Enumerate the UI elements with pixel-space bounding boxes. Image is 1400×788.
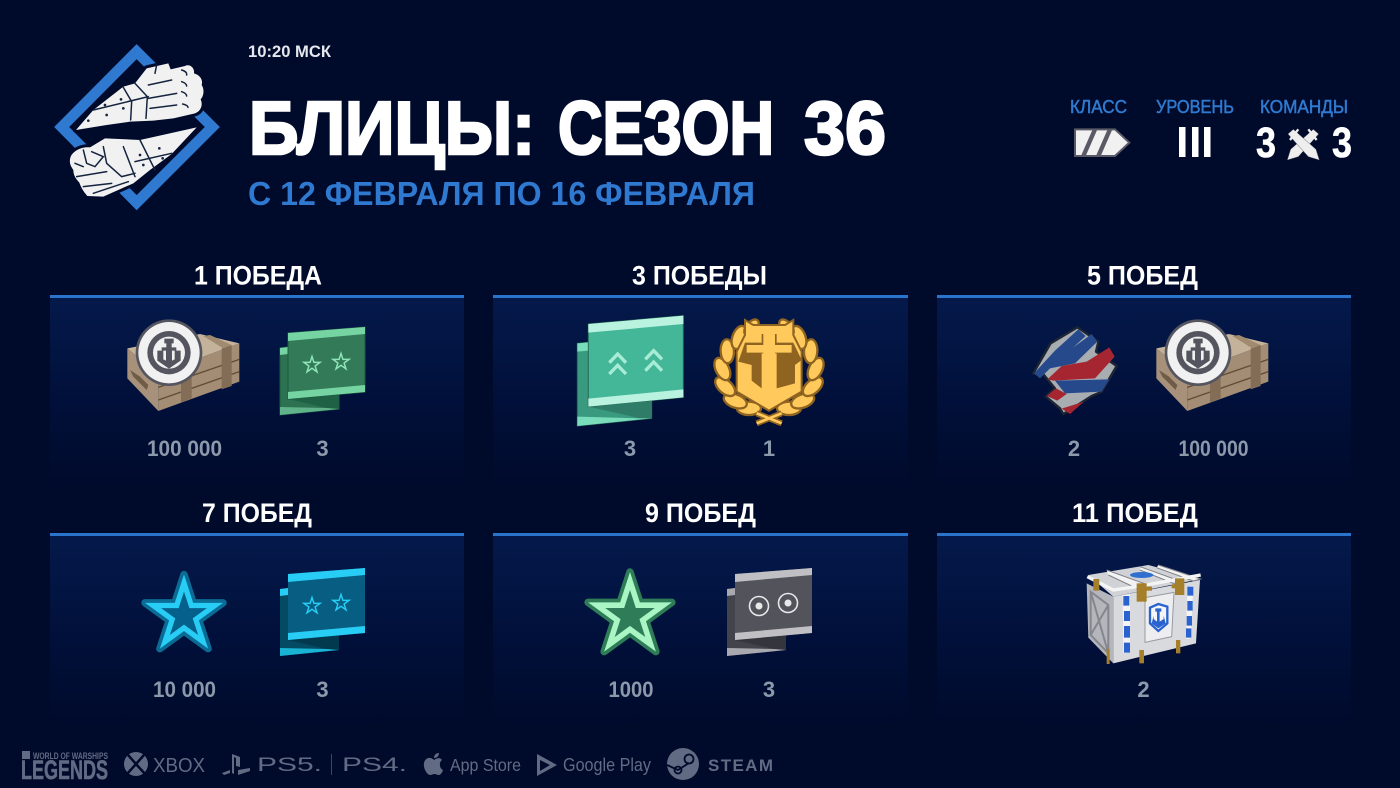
logo: PlayStation 5 and 4: PS5. (257, 755, 322, 776)
panel: 11 wins: 2 (1137, 677, 1150, 702)
battle info: class: КЛАСС (1070, 97, 1127, 117)
icon: green star (588, 572, 672, 652)
title: СЕЗОН (558, 86, 774, 170)
logo: Google Play (537, 754, 651, 776)
logo: PlayStation 5 and 4: PS4. (342, 755, 407, 776)
icon: green star flag (280, 327, 365, 415)
battle info: teams: 3 (1332, 119, 1352, 167)
battle info: tier (1156, 97, 1234, 157)
panel: 11 wins: 11 ПОБЕД (1072, 498, 1198, 528)
icon: blue star (145, 574, 223, 649)
battle info: teams (1256, 97, 1352, 167)
subtitle: dates: С 12 ФЕВРАЛЯ ПО 16 ФЕВРАЛЯ (248, 175, 755, 212)
icon: destroyer class (1075, 129, 1129, 156)
panel: 3 wins: 3 ПОБЕДЫ (632, 260, 767, 290)
logo: crossed gauntlets in diamond (62, 52, 212, 203)
panel: 5 wins: 2 (1068, 436, 1080, 461)
panel: 5 wins: 5 ПОБЕД (1087, 260, 1198, 290)
icon: tier three (1179, 127, 1210, 157)
icon: cyan star flag (280, 568, 365, 656)
panel: 1 win: 1 ПОБЕДА (194, 260, 322, 290)
logo: Steam: STEAM (708, 756, 773, 775)
icon: gold laurel medal (711, 317, 827, 423)
panel: 11 wins (937, 498, 1351, 725)
logo: World of Warships Legends: WORLD OF WARSHIPS (33, 751, 108, 762)
panel: 7 wins: 10 000 (153, 677, 216, 702)
time label: 10:20 МСК (248, 43, 332, 61)
panel: 7 wins: 7 ПОБЕД (202, 498, 312, 528)
icon: white premium crate (1087, 565, 1201, 664)
logo: Steam (667, 748, 773, 780)
icon: teal chevrons flag (577, 316, 683, 426)
icon: credits crate (127, 319, 239, 411)
title: 36 (804, 86, 886, 170)
panel: 9 wins: 1000 (608, 677, 654, 702)
icon: grey anchor flag (727, 568, 812, 656)
panel: 3 wins: 3 (624, 436, 636, 461)
panel: 1 win: 100 000 (147, 436, 222, 461)
battle info: teams: КОМАНДЫ (1260, 97, 1348, 117)
logo: Xbox: XBOX (153, 755, 205, 777)
panel: 5 wins (937, 260, 1351, 487)
panel: 9 wins (493, 498, 908, 725)
battle info: class (1070, 97, 1129, 156)
battle info: tier: УРОВЕНЬ (1156, 97, 1234, 117)
logo: World of Warships Legends (21, 751, 108, 785)
panel: 1 win (50, 260, 464, 487)
logo: App Store: App Store (450, 755, 521, 775)
logo: Google Play: Google Play (563, 755, 651, 775)
logo: App Store (424, 753, 521, 775)
panel: 3 wins (493, 260, 908, 487)
panel: 1 win: 3 (316, 436, 329, 461)
panel: 3 wins: 1 (763, 436, 775, 461)
logo: PlayStation 5 and 4 (222, 754, 407, 776)
footer: platform logos (21, 748, 773, 785)
title: БЛИЦЫ: (249, 86, 535, 170)
panel: 7 wins: 3 (316, 677, 329, 702)
icon: crossed swords (1287, 129, 1319, 160)
panel: 9 wins: 9 ПОБЕД (645, 498, 756, 528)
logo: Xbox (124, 752, 205, 777)
icon: credits crate (1156, 319, 1268, 411)
battle info: teams: 3 (1256, 119, 1276, 167)
panel: 7 wins (50, 498, 464, 725)
panel: 9 wins: 3 (763, 677, 775, 702)
icon: tricolor camouflage (1033, 327, 1117, 414)
logo: World of Warships Legends: LEGENDS (21, 755, 108, 785)
panel: 5 wins: 100 000 (1178, 436, 1248, 461)
